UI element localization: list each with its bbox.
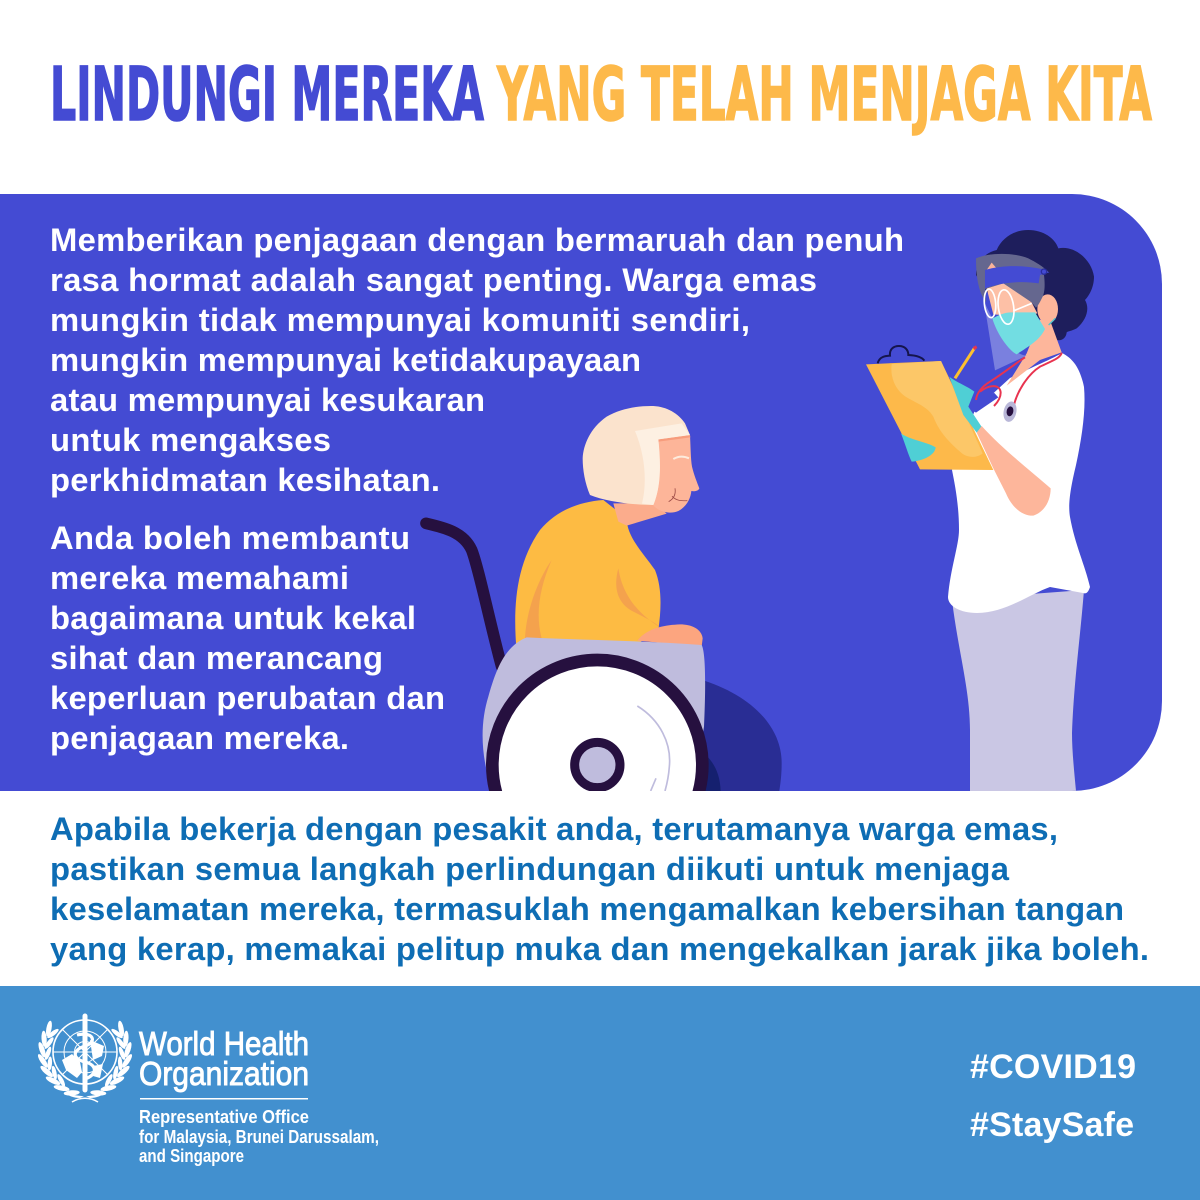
text block: protective steps: pastikan semua langkah perlindungan diikuti untuk menjaga — [50, 850, 1010, 887]
text block: care with dignity: perkhidmatan kesihatan. — [50, 461, 440, 498]
hashtags — [970, 1048, 1136, 1144]
illustration: nurse with clipboard — [866, 230, 1094, 791]
logo text: World Health Organization: Organization — [139, 1055, 309, 1092]
wheelchair shadow — [700, 679, 782, 797]
text block: care with dignity: untuk mengakses — [50, 421, 331, 458]
logo text: World Health Organization: and Singapore — [139, 1146, 244, 1166]
text block: how you can help: sihat dan merancang — [50, 639, 383, 676]
text block: care with dignity: mungkin mempunyai ketidakupayaan — [50, 341, 641, 378]
hashtags: #COVID19 — [970, 1048, 1136, 1086]
pencil — [955, 347, 975, 378]
clipboard — [866, 361, 993, 470]
text block: protective steps: yang kerap, memakai pelitup muka dan mengekalkan jarak jika boleh. — [50, 930, 1149, 967]
wheelchair handle — [426, 523, 502, 667]
icon: WHO emblem — [36, 1016, 134, 1102]
clipboard clip — [878, 346, 924, 363]
panel: illustration background — [0, 194, 1162, 791]
logo text: World Health Organization: for Malaysia, Brunei Darussalam, — [139, 1127, 379, 1147]
logo text: World Health Organization — [139, 1025, 379, 1166]
text block: how you can help: mereka memahami — [50, 559, 349, 596]
illustration: elderly person in wheelchair — [420, 406, 782, 791]
text block: care with dignity: rasa hormat adalah sangat penting. Warga emas — [50, 261, 817, 298]
text block: protective steps: Apabila bekerja dengan pesakit anda, terutamanya warga emas, — [50, 810, 1058, 847]
logo text: World Health Organization: Representative Office — [139, 1107, 309, 1127]
text block: how you can help: Anda boleh membantu — [50, 519, 410, 556]
forearm — [977, 426, 1051, 516]
text block: care with dignity: Memberikan penjagaan dengan bermaruah dan penuh — [50, 221, 904, 258]
nurse's head with face shield — [976, 230, 1094, 386]
trousers — [952, 590, 1084, 791]
hashtags: #StaySafe — [970, 1106, 1134, 1144]
text block: how you can help: keperluan perubatan dan — [50, 679, 445, 716]
text block: how you can help — [50, 519, 445, 756]
text block: protective steps — [50, 810, 1149, 967]
text block: care with dignity — [50, 221, 904, 498]
title: LINDUNGI MEREKA — [50, 52, 484, 138]
wheel — [486, 654, 709, 791]
text block: care with dignity: mungkin tidak mempunyai komuniti sendiri, — [50, 301, 750, 338]
text block: protective steps: keselamatan mereka, termasuklah mengamalkan kebersihan tangan — [50, 890, 1124, 927]
uniform — [948, 353, 1090, 613]
stethoscope — [976, 353, 1062, 406]
blanket — [482, 637, 706, 770]
text block: how you can help: bagaimana untuk kekal — [50, 599, 416, 636]
hands — [637, 624, 703, 647]
footer band — [0, 986, 1200, 1200]
text block: how you can help: penjagaan mereka. — [50, 719, 349, 756]
lower glove — [901, 433, 936, 462]
body: yellow cardigan — [515, 500, 661, 647]
logo text: World Health Organization: World Health — [139, 1025, 309, 1062]
text block: care with dignity: atau mempunyai kesukaran — [50, 381, 485, 418]
elderly person's head — [583, 406, 699, 526]
upper glove — [949, 377, 983, 433]
